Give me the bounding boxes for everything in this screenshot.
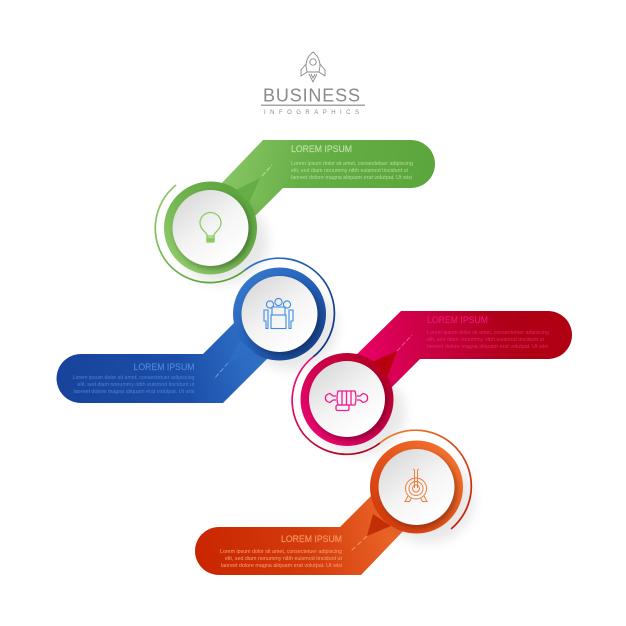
disc shadow: [175, 193, 251, 269]
panel: step 1 green: [155, 140, 435, 284]
heading: LOREM IPSUM: [427, 315, 488, 326]
subtitle: infographics: INFOGRAPHICS: [264, 110, 359, 116]
body text: Lorem ipsum dolor sit amet, consectetuer adipiscing: [220, 549, 342, 555]
arc: [380, 430, 471, 529]
ribbon: [195, 491, 408, 575]
pointer: [367, 514, 391, 536]
arc: [245, 258, 334, 357]
body text: elit, sed diam nonummy nibh euismod tincidunt ut: [225, 556, 343, 562]
dashes: [351, 536, 367, 551]
arc: [292, 357, 380, 454]
icon: light bulb: [200, 213, 221, 242]
ribbon: [350, 311, 572, 394]
body text: Lorem ipsum dolor sit amet, consectetuer adipiscing: [291, 161, 413, 167]
dashes: [262, 165, 272, 176]
panel: step 2 blue: [57, 258, 337, 403]
heading: LOREM IPSUM: [134, 362, 195, 373]
body text: elit, sed diam nonummy nibh euismod tincidunt ut: [427, 337, 545, 343]
dashes: [397, 335, 412, 351]
pointer: [228, 340, 254, 363]
body text: [72, 375, 195, 395]
heading: LOREM IPSUM: [281, 534, 342, 545]
dashes: [214, 363, 228, 379]
body text: laoreet dolore magna aliquam erat volutpat. Ut wisi: [221, 563, 342, 569]
ring: [233, 268, 326, 360]
white disc: [242, 276, 318, 352]
body text: elit, sed diam nonummy nibh euismod tincidunt ut: [291, 168, 409, 174]
disc shadow: [381, 452, 457, 528]
icon: rocket logo: [301, 52, 325, 82]
body text: Lorem ipsum dolor sit amet, consectetuer adipiscing: [427, 330, 549, 336]
circle shadow: [382, 457, 474, 543]
title underline: [261, 105, 365, 106]
ribbon: [57, 319, 272, 403]
body text: Lorem ipsum dolor sit amet, consectetuer adipiscing: [72, 375, 195, 381]
body text: elit, sed diam nonummy nibh euismod tincidunt ut: [78, 382, 195, 388]
body text: [291, 161, 413, 181]
body text: [427, 330, 549, 350]
panel: step 3 red: [292, 311, 572, 455]
body text: laoreet dolore magna aliquam erat volutpat. Ut wisi: [74, 389, 194, 395]
white disc: [309, 361, 385, 437]
circle shadow: [313, 369, 405, 455]
ring: [370, 440, 463, 534]
ring: [164, 182, 257, 274]
icon: archery target: [405, 469, 427, 502]
pointer: [372, 351, 397, 378]
white disc: [172, 190, 248, 266]
circle shadow: [176, 198, 268, 284]
ribbon: [215, 140, 435, 221]
heading: LOREM IPSUM: [291, 144, 352, 155]
body text: laoreet dolore magna aliquam erat volutpat. Ut wisi: [427, 344, 548, 350]
body text: laoreet dolore magna aliquam erat volutpat. Ut wisi: [291, 175, 412, 181]
arc: [155, 185, 245, 283]
panel: step 4 orange: [195, 430, 474, 575]
body text: [220, 549, 343, 569]
pointer: [236, 178, 260, 203]
icon: people at desk: [264, 298, 293, 328]
title: business: BUSINESS: [263, 86, 360, 106]
disc shadow: [312, 364, 388, 440]
ring: [300, 353, 394, 446]
circle shadow: [245, 284, 337, 370]
disc shadow: [244, 279, 320, 355]
icon: hand with wrench: [325, 391, 368, 410]
white disc: [378, 449, 454, 525]
